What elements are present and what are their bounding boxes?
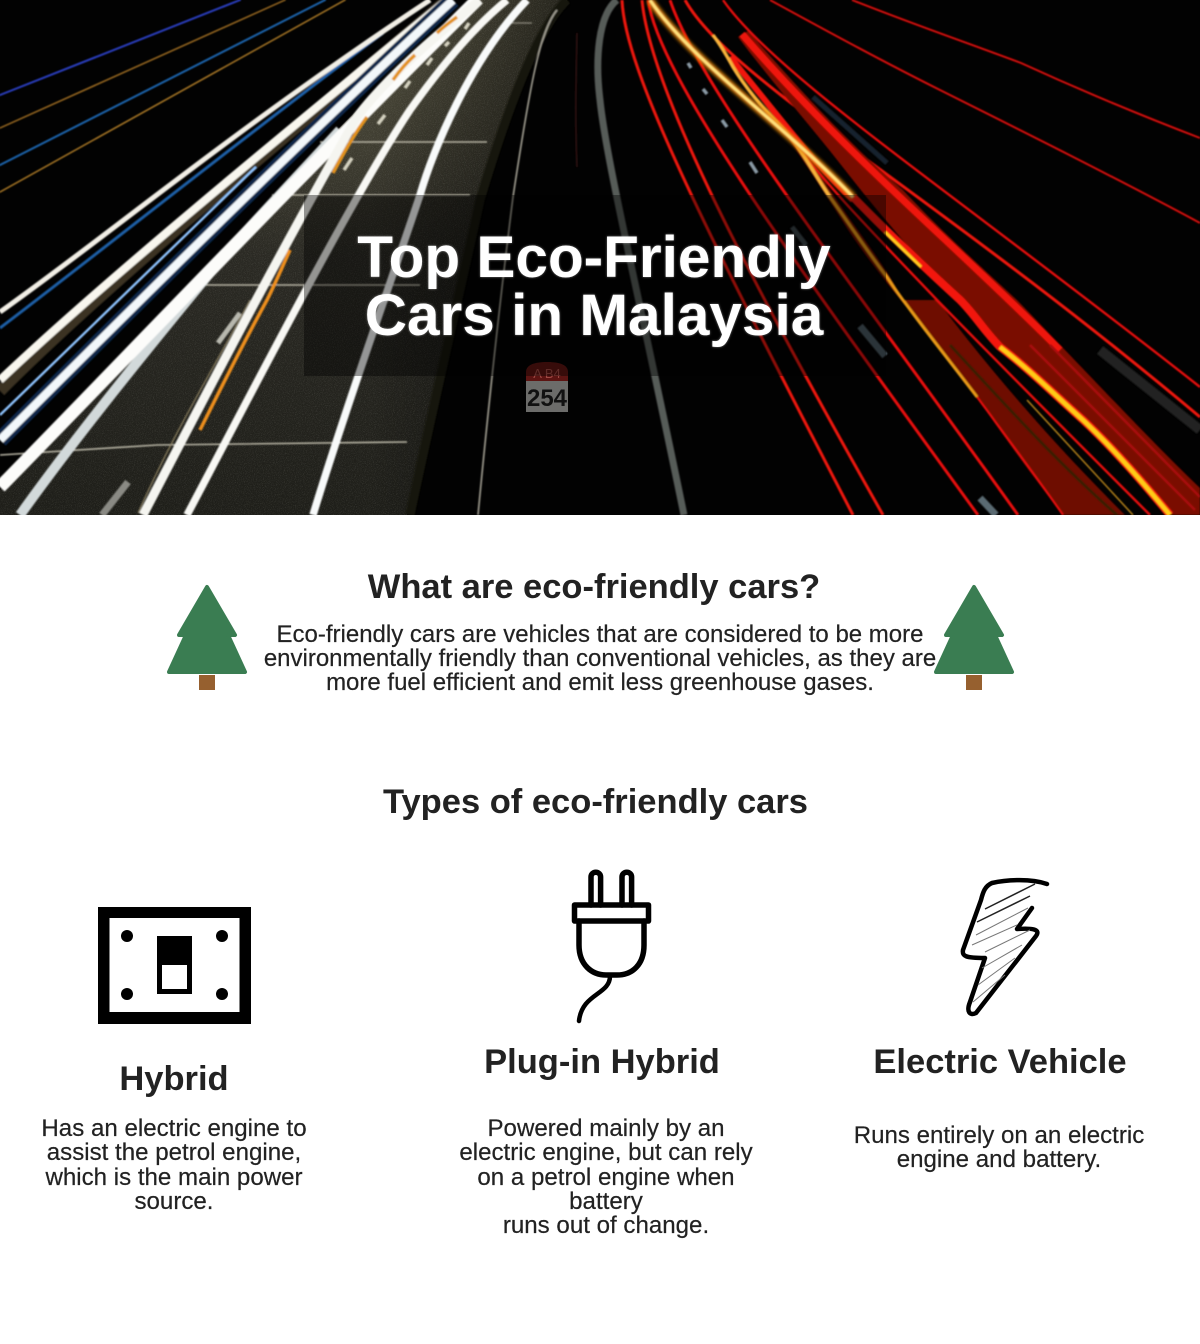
lane dashes xyxy=(688,63,996,515)
text: definition: Eco-friendly cars are vehicles that are considered to be more xyxy=(276,621,923,648)
heading: electric vehicle: Electric Vehicle xyxy=(873,1043,1127,1081)
text: plug-in description: on a petrol engine when xyxy=(477,1164,735,1191)
icon: hybrid switch xyxy=(98,907,251,1024)
road markings xyxy=(0,23,532,455)
heading: types: Types of eco-friendly cars xyxy=(383,783,808,821)
text: hybrid description xyxy=(41,1115,307,1215)
title: Top Eco-Friendly xyxy=(357,225,831,290)
card: hybrid xyxy=(41,1060,307,1215)
asphalt xyxy=(0,0,570,515)
text: definition: more fuel efficient and emit less greenhouse gases. xyxy=(326,669,874,696)
heading: what are eco-friendly cars: What are eco-friendly cars? xyxy=(368,568,820,606)
text: hybrid description: Has an electric engine to xyxy=(41,1115,307,1142)
icon: tree right xyxy=(934,584,1014,690)
road sign: A B4 xyxy=(533,366,561,381)
icon: tree left xyxy=(167,584,248,690)
title xyxy=(356,225,832,348)
text: hybrid description: which is the main power xyxy=(45,1164,303,1191)
text: electric description: Runs entirely on an electric xyxy=(854,1122,1144,1149)
road edge lines xyxy=(410,0,684,515)
heading: plug-in hybrid: Plug-in Hybrid xyxy=(484,1043,720,1081)
text: electric description xyxy=(854,1122,1144,1173)
text: electric description: engine and battery. xyxy=(897,1146,1101,1173)
text: hybrid description: source. xyxy=(134,1188,214,1215)
card: electric vehicle xyxy=(854,1043,1144,1173)
second red light band xyxy=(730,57,1125,515)
text: definition xyxy=(264,621,936,696)
blue and orange thin trails xyxy=(0,0,345,192)
text: plug-in description: runs out of change. xyxy=(503,1212,709,1239)
text: plug-in description xyxy=(459,1115,753,1239)
white headlight trails xyxy=(0,0,527,515)
road sign xyxy=(526,362,568,412)
red tail-light trails xyxy=(622,0,1200,515)
title backdrop xyxy=(304,195,886,376)
text: definition: environmentally friendly than conventional vehicles, as they are xyxy=(264,645,936,672)
text: plug-in description: electric engine, but can rely xyxy=(459,1139,753,1166)
text: plug-in description: battery xyxy=(569,1188,643,1215)
card: plug-in hybrid xyxy=(459,1043,753,1239)
text: plug-in description: Powered mainly by an xyxy=(487,1115,725,1142)
icon: lightning bolt xyxy=(960,878,1050,1016)
title: Cars in Malaysia xyxy=(365,283,823,348)
icon: plug xyxy=(572,870,652,1024)
road sign: 254 xyxy=(527,385,568,412)
text: hybrid description: assist the petrol engine, xyxy=(47,1139,301,1166)
main red light band xyxy=(738,31,1200,515)
heading: hybrid: Hybrid xyxy=(119,1060,229,1098)
hero photo: highway light trails at night xyxy=(0,0,1200,515)
